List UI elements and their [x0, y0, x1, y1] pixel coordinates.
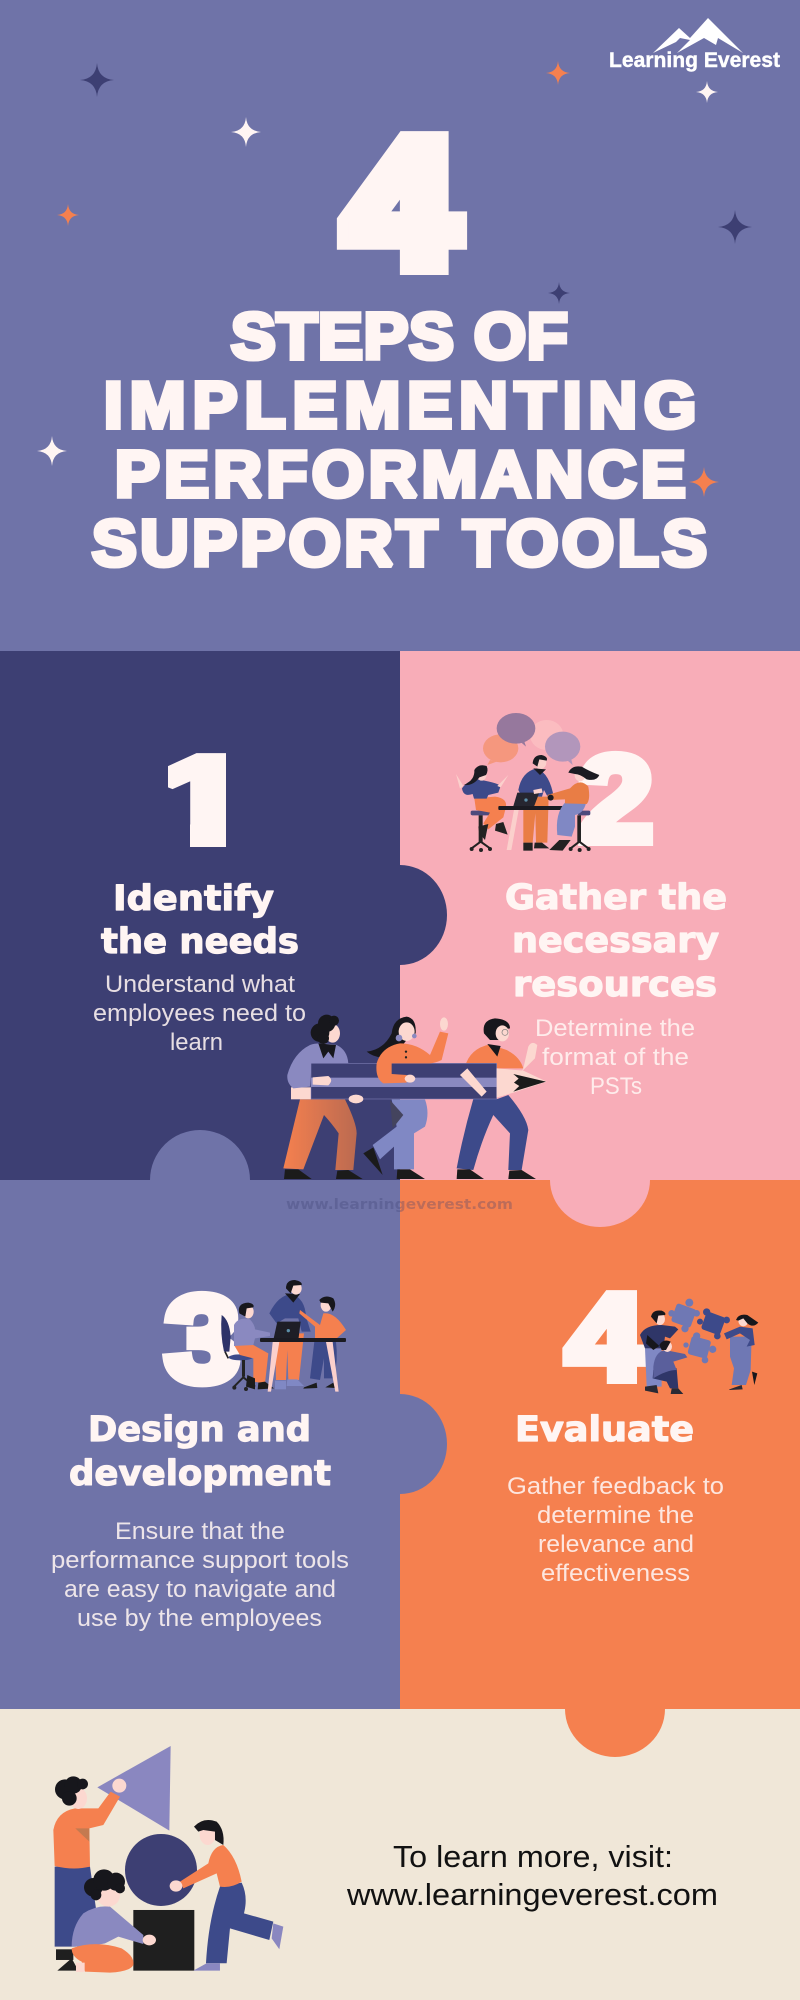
step 1 heading: Identify	[113, 879, 274, 919]
step 2 body: Determine the	[535, 1015, 695, 1042]
step 4 body: determine the	[537, 1502, 694, 1529]
step 3 body: are easy to navigate and	[64, 1576, 336, 1603]
logo: Learning Everest: Learning Everest	[609, 49, 780, 72]
title: IMPLEMENTING	[104, 368, 696, 441]
step 2 body: PSTs	[590, 1073, 642, 1100]
step 1 body: learn	[170, 1029, 223, 1056]
big number 4: 4	[345, 103, 457, 304]
step 2 heading: Gather the	[505, 878, 727, 918]
step 3 heading: Design and	[88, 1410, 311, 1450]
step 1 heading: the needs	[101, 922, 299, 962]
step 3 body: use by the employees	[77, 1605, 322, 1632]
step 4 number: 4	[566, 1269, 645, 1405]
decorative stars	[37, 61, 752, 497]
step 4 body: effectiveness	[541, 1560, 690, 1587]
title: STEPS OF	[231, 299, 568, 372]
step 3 heading	[69, 1410, 331, 1494]
puzzle tab: step 1 right	[400, 865, 447, 965]
title	[92, 299, 707, 579]
logo: Learning Everest	[609, 18, 780, 72]
step 4 body: relevance and	[538, 1531, 694, 1558]
title: PERFORMANCE	[115, 437, 686, 510]
panel: header background	[0, 0, 800, 651]
panel: step 3 background	[0, 1180, 400, 1709]
step 2 number: 2	[579, 731, 653, 867]
puzzle tab: step 3 right	[400, 1394, 447, 1494]
step 1 body: Understand what	[105, 971, 295, 998]
step 2 body	[535, 1015, 695, 1100]
footer call to action	[346, 1839, 718, 1912]
step 4 heading: Evaluate	[515, 1410, 694, 1450]
puzzle tab: step 2 falling into step 4	[550, 1180, 650, 1227]
step 3 body: performance support tools	[51, 1547, 349, 1574]
footer call to action: To learn more, visit:	[393, 1839, 673, 1874]
puzzle tab: step 4 falling into footer	[565, 1709, 665, 1757]
panel: step 2 background	[400, 651, 800, 1180]
illustration: three people building with shapes	[53, 1746, 283, 1973]
puzzle tab: step 3 rising into step 1	[150, 1130, 250, 1180]
step 3 body: Ensure that the	[115, 1518, 285, 1545]
illustration: team discussing with speech bubbles	[456, 713, 599, 852]
illustration: three people carrying a giant pencil	[283, 1015, 547, 1179]
step 1 heading	[101, 879, 299, 962]
step 4 body: Gather feedback to	[507, 1473, 724, 1500]
panel: step 1 background	[0, 651, 400, 1180]
panel: step 4 background	[400, 1180, 800, 1709]
illustration: team at a desk with laptop	[221, 1280, 346, 1392]
step 1 number: 1	[157, 732, 253, 868]
step 4 body	[507, 1473, 724, 1587]
footer call to action: www.learningeverest.com	[346, 1877, 718, 1912]
step 2 heading	[505, 878, 727, 1005]
title: SUPPORT TOOLS	[92, 506, 707, 579]
step 3 heading: development	[69, 1454, 331, 1494]
step 2 heading: necessary	[512, 921, 719, 961]
step 3 number: 3	[165, 1271, 240, 1407]
panel: footer background	[0, 1709, 800, 2000]
step 2 body: format of the	[542, 1044, 689, 1071]
watermark url: www.learningeverest.com	[286, 1197, 513, 1213]
illustration: team assembling puzzle pieces	[640, 1299, 758, 1394]
step 1 body	[93, 971, 306, 1056]
step 3 body	[51, 1518, 349, 1632]
step 2 heading: resources	[513, 965, 717, 1005]
step 1 body: employees need to	[93, 1000, 306, 1027]
